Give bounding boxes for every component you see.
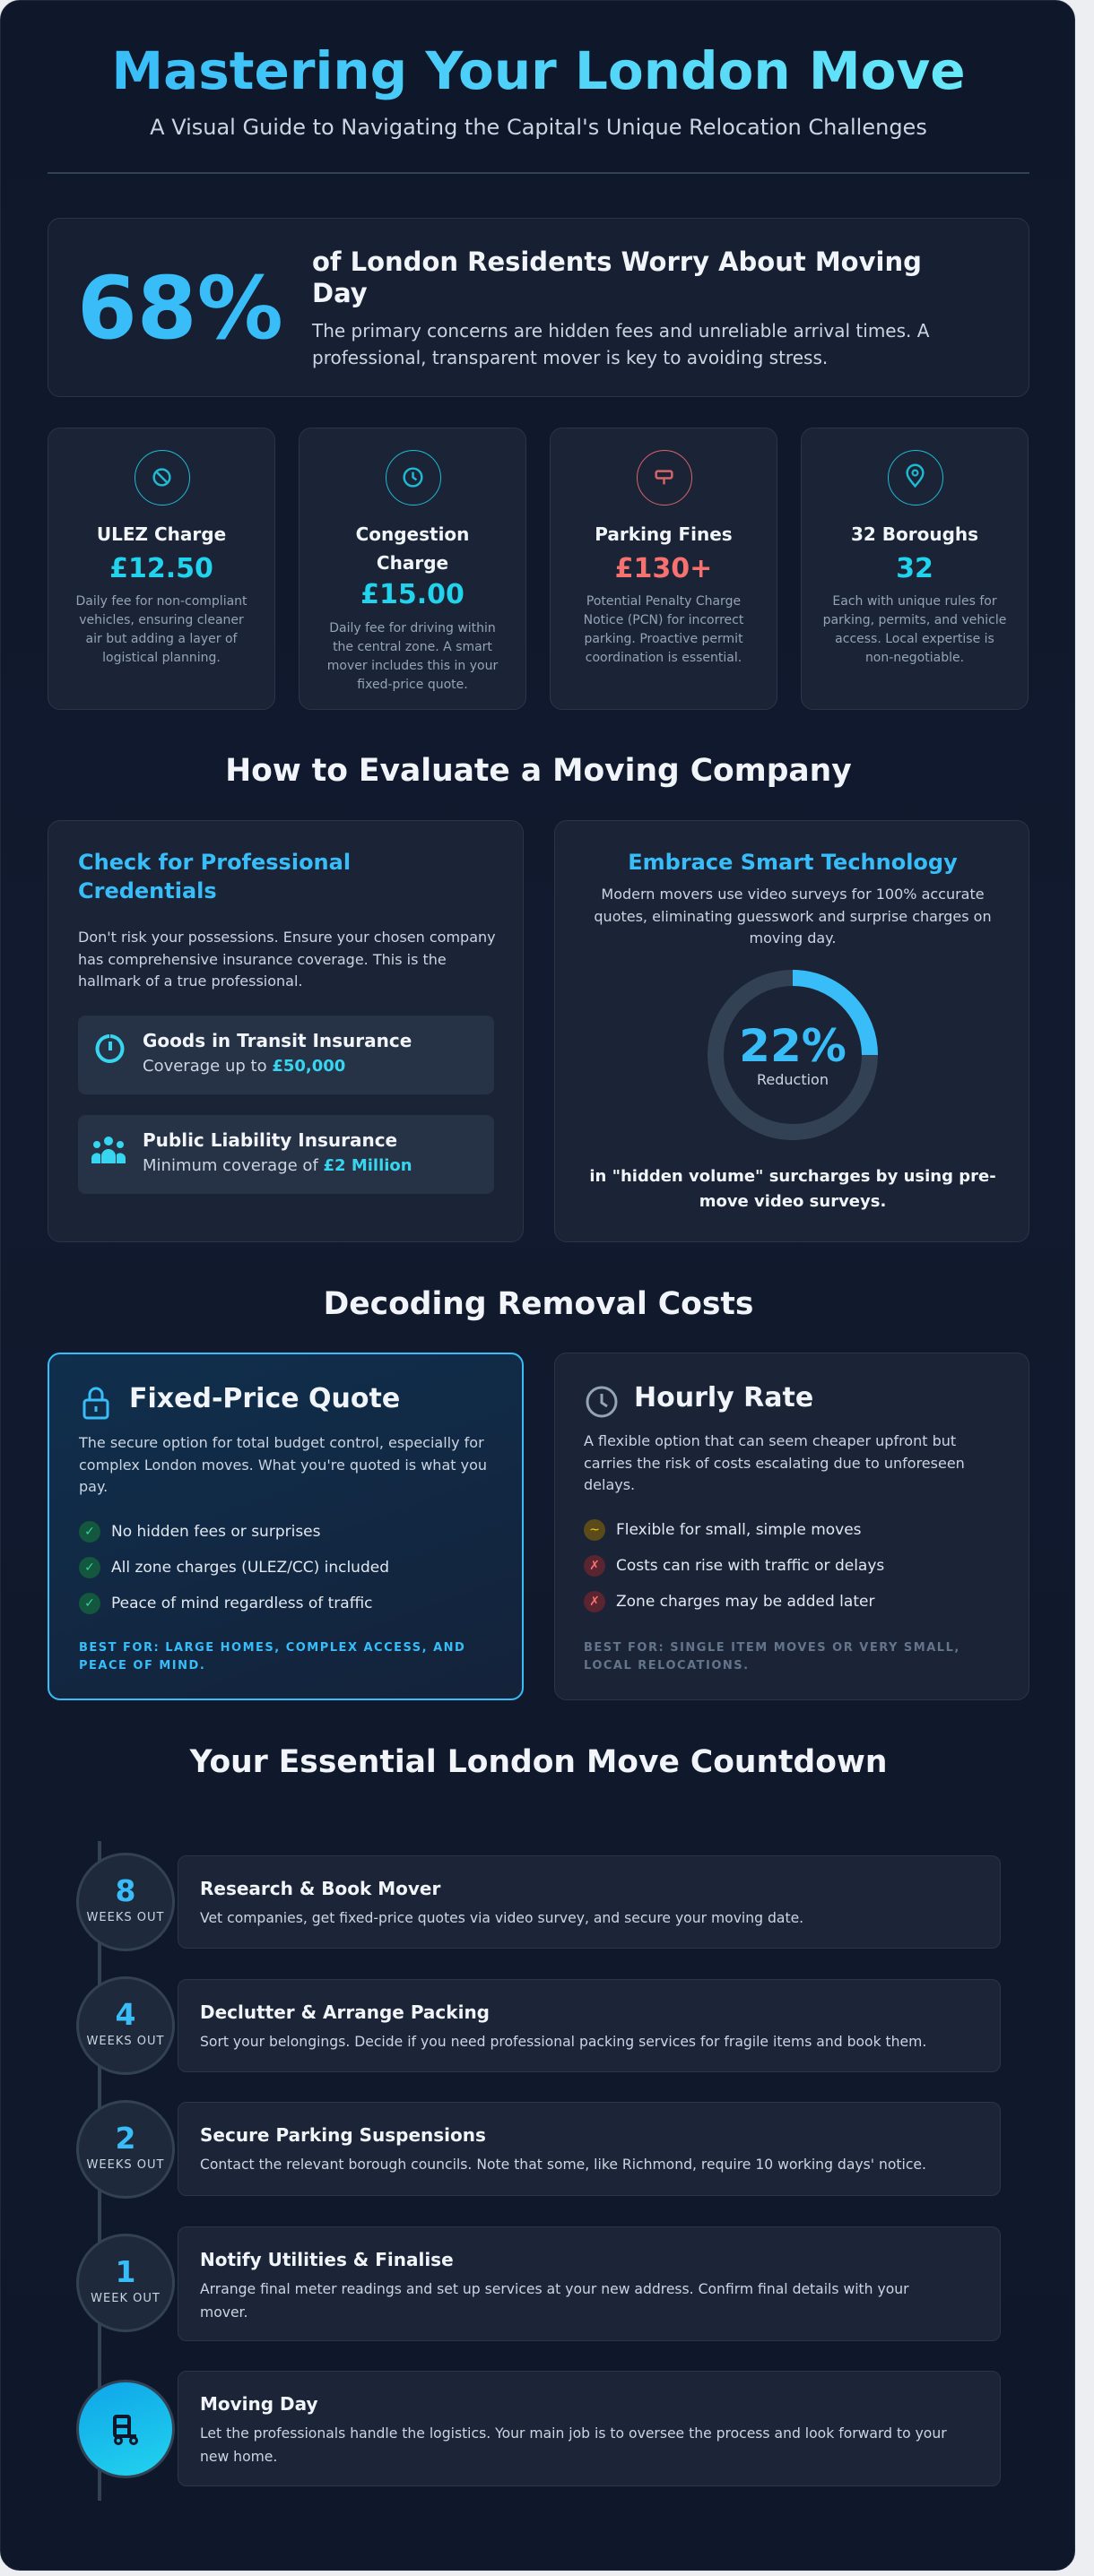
step: 8 weeks: Research & Book Mover xyxy=(200,1878,440,1899)
donut chart 22%: Reduction xyxy=(757,1071,829,1088)
panel: boroughs: 32 Boroughs xyxy=(851,523,978,545)
panel: boroughs: Each with unique rules for parking, permits, and vehicle access. Local expertise is non-negotiable. xyxy=(823,594,1006,665)
step: 2 weeks: Secure Parking Suspensions xyxy=(200,2124,486,2146)
panel: ULEZ xyxy=(48,428,275,710)
insurance: public liability xyxy=(78,1115,494,1194)
fixed list: ✓ xyxy=(84,1560,95,1575)
credentials text: Don't risk your possessions. Ensure your chosen company has comprehensive insurance coverage. This is the hallmark of a true professional. xyxy=(78,929,496,990)
step: 4 weeks: Sort your belongings. Decide if you need professional packing services for fragile items and book them. xyxy=(200,2034,926,2050)
fixed list: ✓ xyxy=(84,1525,95,1539)
step: 4 weeks: 4 xyxy=(116,1997,135,2032)
step: 1 week: Arrange final meter readings and set up services at your new address. Confirm final details with your mover. xyxy=(200,2281,909,2321)
tech title: Embrace Smart Technology xyxy=(628,850,958,875)
panel: fixed price xyxy=(48,1353,524,1700)
step: 8 weeks xyxy=(76,1853,1001,1951)
timeline xyxy=(76,1841,1001,2501)
panel: congestion: Charge xyxy=(377,552,448,574)
fixed list: ✓ xyxy=(84,1596,95,1611)
panel: hero stat xyxy=(48,218,1029,397)
title: Mastering Your London Move xyxy=(111,40,966,101)
panel: congestion xyxy=(299,428,526,710)
step: 2 weeks: WEEKS OUT xyxy=(87,2158,164,2172)
panel: smart technology xyxy=(554,820,1029,1242)
icon: people xyxy=(91,1137,126,1163)
icon: parking sign xyxy=(637,450,692,506)
step: 4 weeks: WEEKS OUT xyxy=(87,2035,164,2048)
panel: congestion: Daily fee for driving within the central zone. A smart mover includes this in your fixed-price quote. xyxy=(327,621,498,692)
step: 8 weeks: Vet companies, get fixed-price quotes via video survey, and secure your moving date. xyxy=(200,1910,803,1926)
panel: congestion: Congestion xyxy=(356,523,469,545)
hourly text: A flexible option that can seem cheaper upfront but carries the risk of costs escalating due to unforeseen delays. xyxy=(584,1432,965,1493)
hourly best for: BEST FOR: SINGLE ITEM MOVES OR VERY SMALL, LOCAL RELOCATIONS. xyxy=(584,1641,960,1673)
heading: costs: Decoding Removal Costs xyxy=(324,1286,753,1322)
fixed list: All zone charges (ULEZ/CC) included xyxy=(111,1559,389,1577)
step: 4 weeks xyxy=(76,1976,1001,2075)
step: 1 week xyxy=(76,2226,1001,2341)
hourly list: Costs can rise with traffic or delays xyxy=(616,1557,884,1575)
hero heading: of London Residents Worry About Moving Day xyxy=(312,246,922,308)
step: moving day: Let the professionals handle the logistics. Your main job is to oversee the process and look forward to your new home. xyxy=(200,2425,947,2465)
donut chart 22%: 22% xyxy=(739,1020,847,1072)
hourly list: Zone charges may be added later xyxy=(616,1593,874,1611)
panel: parking: Potential Penalty Charge Notice (PCN) for incorrect parking. Proactive permit coordination is essential. xyxy=(584,594,743,665)
hourly list: ~ xyxy=(589,1523,600,1537)
step: 8 weeks: WEEKS OUT xyxy=(87,1911,164,1924)
icon: shield xyxy=(95,1034,124,1063)
icon: pin xyxy=(888,450,943,506)
icon: clock xyxy=(386,450,441,506)
step: 1 week: WEEK OUT xyxy=(91,2292,161,2305)
step: 2 weeks: Contact the relevant borough councils. Note that some, like Richmond, require 10 working days' notice. xyxy=(200,2157,926,2173)
step: moving day: Moving Day xyxy=(200,2393,318,2415)
tech text: Modern movers use video surveys for 100% accurate quotes, eliminating guesswork and surprise charges on moving day. xyxy=(594,886,992,947)
credentials title: Check for Professional Credentials xyxy=(78,850,351,903)
panel: credentials xyxy=(48,820,524,1242)
step: 2 weeks: 2 xyxy=(116,2121,135,2156)
panel: hourly rate xyxy=(554,1353,1029,1700)
insurance: goods in transit: Coverage up to £50,000 xyxy=(143,1057,345,1076)
hero text: The primary concerns are hidden fees and unreliable arrival times. A professional, transparent mover is key to avoiding stress. xyxy=(312,320,929,368)
panel: ULEZ: £12.50 xyxy=(109,553,213,584)
panel: parking xyxy=(550,428,777,710)
icon: lock xyxy=(82,1387,109,1420)
step: moving day xyxy=(76,2371,1001,2486)
step: 2 weeks xyxy=(76,2100,1001,2199)
donut chart 22% xyxy=(708,970,878,1140)
subtitle: A Visual Guide to Navigating the Capital's Unique Relocation Challenges xyxy=(150,115,927,140)
hourly list: ✗ xyxy=(589,1559,600,1573)
fixed list xyxy=(79,1521,389,1614)
insurance: public liability: Public Liability Insurance xyxy=(143,1129,397,1151)
insurance: goods in transit xyxy=(78,1016,494,1094)
panel: parking: £130+ xyxy=(615,553,712,584)
panel: boroughs: 32 xyxy=(896,553,933,584)
fixed best for: BEST FOR: LARGE HOMES, COMPLEX ACCESS, AND PEACE OF MIND. xyxy=(79,1641,465,1673)
step: 4 weeks: Declutter & Arrange Packing xyxy=(200,2001,490,2023)
heading: evaluate: How to Evaluate a Moving Company xyxy=(225,753,852,789)
hourly list: Flexible for small, simple moves xyxy=(616,1521,862,1539)
icon: ulez xyxy=(135,450,190,506)
panel: ULEZ: Daily fee for non-compliant vehicles, ensuring cleaner air but adding a layer of logistical planning. xyxy=(75,594,247,665)
tech caption: in "hidden volume" surcharges by using pre-move video surveys. xyxy=(589,1167,996,1211)
step: 1 week: 1 xyxy=(116,2254,135,2289)
step: 1 week: Notify Utilities & Finalise xyxy=(200,2249,454,2270)
heading: countdown: Your Essential London Move Countdown xyxy=(190,1744,887,1780)
icon: clock xyxy=(586,1386,617,1418)
panel: parking: Parking Fines xyxy=(595,523,733,545)
hourly title: Hourly Rate xyxy=(634,1382,813,1413)
big stat 68%: 68% xyxy=(77,258,283,359)
fixed list: No hidden fees or surprises xyxy=(111,1523,321,1541)
icon: truck xyxy=(113,2415,138,2445)
panel: congestion: £15.00 xyxy=(360,579,465,610)
panel: boroughs xyxy=(801,428,1029,710)
step: 8 weeks: 8 xyxy=(116,1873,135,1908)
hourly list: ✗ xyxy=(589,1595,600,1609)
insurance: public liability: Minimum coverage of £2 Million xyxy=(143,1156,412,1175)
fixed text: The secure option for total budget control, especially for complex London moves. What you're quoted is what you pay. xyxy=(79,1434,487,1495)
fixed list: Peace of mind regardless of traffic xyxy=(111,1595,372,1612)
hourly list xyxy=(584,1519,884,1612)
panel: ULEZ: ULEZ Charge xyxy=(97,523,226,545)
fixed title: Fixed-Price Quote xyxy=(129,1383,400,1414)
insurance: goods in transit: Goods in Transit Insurance xyxy=(143,1030,412,1051)
